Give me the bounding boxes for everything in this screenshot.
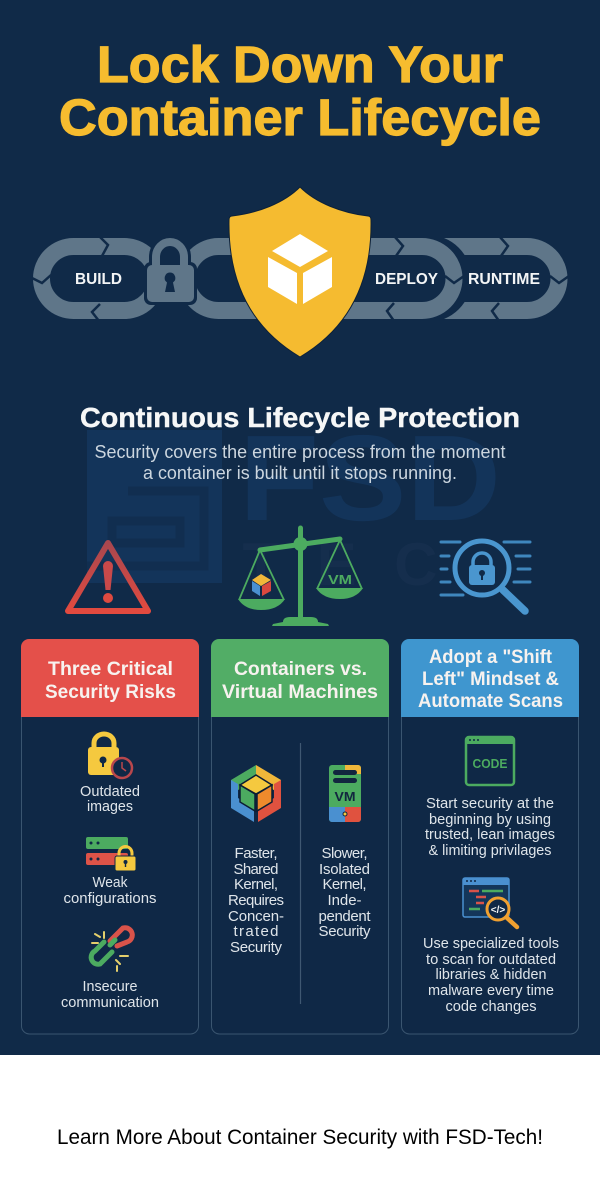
watermark logo: FSD [239,410,501,546]
text: start security: beginning by using [429,811,551,828]
icon: magnifier with lock [441,541,530,611]
text: start security [425,795,555,859]
padlock [144,242,197,305]
chain link: middle [186,246,280,310]
chain link: deploy [340,246,460,310]
right pan with VM: VM [328,572,352,587]
chain notches [32,237,569,321]
text: start security: trusted, lean images [425,826,555,843]
panel header: red [21,639,199,717]
text: VM traits: Kernel, [322,876,366,893]
panel: containers vs VMs [211,639,389,1034]
text: container traits: trated [234,923,278,940]
label: weak configurations [64,874,156,907]
heading: risks: Three Critical [48,658,173,680]
panel: critical risks [21,639,199,1034]
icon: code window [466,737,514,785]
text: scanning tools: libraries & hidden [436,966,546,983]
text: start security: Start security at the [426,795,554,812]
text: VM traits [318,845,371,940]
text: container traits: Security [230,939,282,956]
label: weak configurations: Weak [92,874,128,891]
stage label: build: BUILD [75,271,122,288]
text: scanning tools [423,935,559,1015]
shield with container cube [229,187,371,357]
text: scanning tools: malware every time [428,982,554,999]
icon: outdated lock [88,734,132,778]
heading: shift left: Adopt a "Shift [429,646,552,668]
text: container traits: Faster, [234,845,278,862]
panel header: green [211,639,389,717]
text: container traits: Shared [234,861,278,878]
column divider [300,743,302,1004]
watermark logo: TEC [242,531,438,598]
heading: containers vs VMs: Containers vs. [234,658,367,680]
heading: risks: Security Risks [45,681,176,703]
text: container traits: Kernel, [234,876,278,893]
title [59,36,541,146]
label: insecure communication: Insecure [82,978,138,995]
text: scanning tools: to scan for outdated [426,951,556,968]
text: start security: & limiting privilages [428,842,552,859]
panel header: blue [401,639,579,717]
section description: a container is built until it stops running. [143,463,457,483]
label: outdated images: Outdated [80,783,140,800]
label: outdated images [80,783,140,815]
stage label: deploy: DEPLOY [375,271,438,288]
heading: shift left: Left" Mindset & [422,668,559,690]
title: Lock Down Your [97,36,503,93]
chain link: build [42,246,156,310]
heading: shift left [418,646,563,712]
icon: balance scale [238,528,363,626]
text: container traits [228,845,284,956]
icon: broken chain link [91,928,132,971]
icon: VM server [329,765,361,822]
heading: containers vs VMs [222,658,378,703]
left pan with container [238,550,285,610]
text: VM traits: pendent [318,908,371,925]
chain link: runtime [442,246,559,310]
text: scanning tools: Use specialized tools [423,935,559,952]
icon: code window: CODE [472,757,508,771]
panel: shift left [401,639,579,1034]
icon: container hexagon [231,765,281,822]
section description: Security covers the entire process from the moment [94,442,506,462]
icon: weak config server [86,837,136,871]
label: insecure communication: communication [61,994,159,1011]
text: VM traits: Isolated [319,861,370,878]
text: container traits: Requires [228,892,284,909]
text: VM traits: Security [318,923,371,940]
title: Container Lifecycle [59,89,541,146]
lifecycle chain [32,237,569,321]
text: container traits: Concen- [228,908,284,925]
icon: code scan: </> [491,905,505,916]
watermark logo [87,410,501,598]
text: VM traits: Inde- [328,892,362,909]
text: scanning tools: code changes [446,998,536,1015]
label: outdated images: images [87,798,133,815]
text: VM traits: Slower, [322,845,368,862]
icon: warning triangle [68,543,148,611]
heading: risks [45,658,176,703]
icon: VM server: VM [334,789,356,804]
heading: shift left: Automate Scans [418,690,563,712]
footer call to action: Learn More About Container Security with FSD-Tech! [57,1126,543,1149]
label: weak configurations: configurations [64,890,156,907]
label: insecure communication [61,978,159,1011]
section heading: Continuous Lifecycle Protection [80,402,520,433]
section description [94,442,506,483]
stage label: runtime: RUNTIME [468,271,540,288]
icon: code scan [463,878,517,927]
heading: containers vs VMs: Virtual Machines [222,681,378,703]
